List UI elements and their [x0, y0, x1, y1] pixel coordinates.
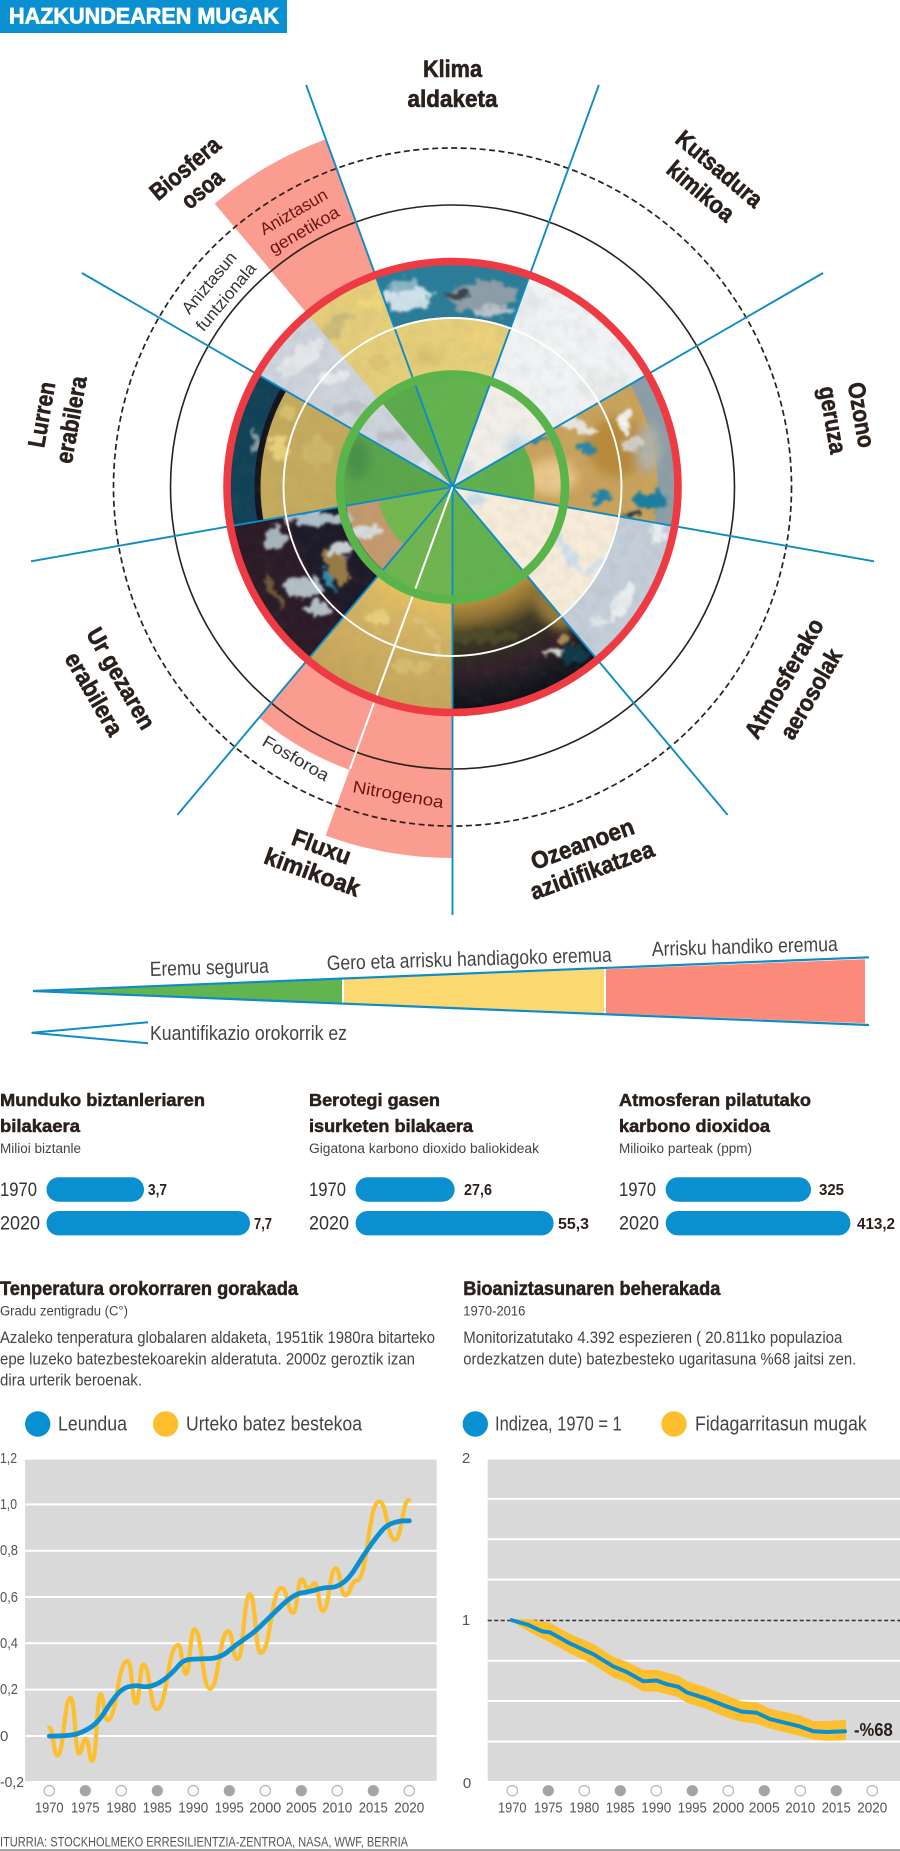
smoothed line: [49, 1521, 409, 1736]
text: Arrisku handiko eremua: Arrisku handiko eremua: [651, 933, 839, 961]
overshoot wedge: Fosforoa: [259, 487, 452, 770]
label: Kutsadura kimikoa: Kutsadura: [670, 125, 768, 214]
stat panel: atmospheric CO2: [619, 1090, 895, 1235]
inner spokes over globe: [234, 278, 671, 709]
x axis years: 1975: [534, 1800, 563, 1817]
safe zone segment: [33, 979, 342, 1003]
heading line two: isurketen bilakaera: [309, 1116, 473, 1136]
heading: Tenperatura orokorraren gorakada: [0, 1279, 298, 1300]
unit: 1970-2016: [463, 1304, 525, 1320]
label: Atmosferako aerosolak: Atmosferako: [739, 614, 830, 744]
label: Aniztasun genetikoa: genetikoa: [266, 202, 343, 258]
label: Atmosferako aerosolak: [739, 614, 857, 759]
end value: -%68: [854, 1720, 893, 1740]
legend: [25, 1411, 363, 1437]
text: Eremu segurua: Eremu segurua: [149, 955, 270, 981]
high risk boundary circle: [170, 205, 734, 769]
sector: Fluxu kimikoak: [346, 492, 452, 676]
legend: [463, 1411, 867, 1437]
label: Biosfera osoa: osoa: [176, 164, 230, 215]
label: Aniztasun funtzionala: funtzionala: [192, 259, 260, 335]
sector: Kutsadura kimikoa: [454, 279, 644, 485]
y axis labels: 1,2: [0, 1450, 17, 1467]
white middle ring: [284, 318, 622, 656]
red boundary ring: [227, 262, 678, 712]
label: Ozeanoen azidifikatzea: [517, 809, 658, 906]
bar 2020: 55,3: [558, 1216, 589, 1233]
legend: Urteko batez bestekoa: [186, 1413, 363, 1435]
heading line two: bilakaera: [0, 1116, 80, 1136]
label: Biosfera osoa: [145, 131, 244, 227]
line chart: temperature: [0, 1450, 437, 1817]
label: Fosforoa: Fosforoa: [259, 732, 333, 786]
label: Ur gezaren erabilera: [54, 623, 160, 750]
y axis labels: 0,4: [0, 1635, 18, 1652]
dashed outer circle: [114, 148, 792, 826]
overshoot wedge: Nitrogenoa: [326, 487, 452, 858]
no quantification legend: [32, 1022, 347, 1045]
x axis years: 1990: [641, 1800, 671, 1817]
earth globe sectors: [230, 264, 676, 710]
bar 2020: [0, 1211, 272, 1235]
label: Ozono geruza: [813, 379, 880, 456]
x axis years: 2005: [749, 1800, 780, 1817]
line chart: living planet index: [462, 1450, 900, 1817]
bar 1970: [0, 1177, 167, 1202]
label: Aniztasun funtzionala: [175, 245, 260, 335]
label: Fluxu kimikoak: Fluxu: [288, 824, 355, 870]
label: Aniztasun funtzionala: Aniztasun: [178, 248, 241, 318]
x axis years: 1975: [71, 1800, 100, 1817]
sector: Lurren erabilera: [230, 377, 450, 524]
y axis labels: 0: [463, 1775, 471, 1792]
label: Ur gezaren erabilera: erabilera: [59, 648, 129, 741]
legend: Indizea, 1970 = 1: [495, 1413, 622, 1435]
label: Atmosferako aerosolak: aerosolak: [775, 644, 848, 744]
confidence band: [512, 1620, 845, 1740]
legend: Fidagarritasun mugak: [695, 1413, 867, 1435]
heading: Munduko biztanleriaren: [0, 1090, 205, 1110]
planetary boundaries diagram: [21, 56, 880, 915]
sector: Aniztasun funtzionala: [261, 317, 450, 485]
x axis years: 2005: [286, 1800, 317, 1817]
stat panel: population: [0, 1090, 272, 1235]
label: Kutsadura kimikoa: [651, 125, 768, 236]
x axis years: [35, 1800, 424, 1817]
y axis labels: [462, 1450, 471, 1792]
overshoot wedge: Biosfera osoa: [215, 139, 452, 487]
x axis years: 1985: [606, 1800, 635, 1817]
bar 1970: 27,6: [464, 1182, 492, 1199]
x axis years: 1980: [106, 1800, 136, 1817]
bar 2020: [309, 1211, 589, 1235]
green safe-zone ring: [340, 374, 565, 600]
x axis years: 1985: [143, 1800, 172, 1817]
heading: Atmosferan pilatutako: [619, 1090, 811, 1110]
bar 1970: 3,7: [148, 1182, 167, 1199]
unit: Gradu zentigradu (C°): [0, 1304, 128, 1320]
legend: Leundua: [58, 1413, 128, 1435]
index line: [512, 1620, 845, 1732]
bar 1970: 325: [819, 1182, 844, 1199]
heading: Bioaniztasunaren beherakada: [463, 1279, 721, 1300]
x axis years: 1995: [678, 1800, 707, 1817]
x axis years: 1990: [178, 1800, 208, 1817]
label: Ozeanoen azidifikatzea: Ozeanoen: [527, 813, 638, 876]
label: Fluxu kimikoak: kimikoak: [260, 843, 364, 903]
x axis years: 1970: [35, 1800, 64, 1817]
description: ordezkatzen dute) batezbesteko ugaritasuna %68 jaitsi zen.: [463, 1350, 856, 1368]
high risk segment: [606, 959, 865, 1023]
x axis years: 2020: [394, 1800, 424, 1817]
source line: ITURRIA: STOCKHOLMEKO ERRESILIENTZIA-ZENTROA, NASA, WWF, BERRIA: [0, 1834, 409, 1850]
sector: Klima aldaketa: [377, 265, 528, 484]
y axis labels: 0,2: [0, 1681, 18, 1698]
x axis years: 2015: [822, 1800, 851, 1817]
label: Klima aldaketa: aldaketa: [408, 86, 498, 113]
bar 2020: 413,2: [857, 1216, 895, 1233]
label: Lurren erabilera: Lurren: [23, 380, 61, 450]
risk zones legend wedge: [33, 933, 869, 1025]
description: dira urterik beroenak.: [0, 1372, 142, 1390]
sector spokes: [31, 85, 874, 915]
y axis labels: [0, 1450, 24, 1791]
x axis years: 1970: [498, 1800, 527, 1817]
y axis labels: 0,6: [0, 1589, 18, 1606]
x axis years: 2010: [785, 1800, 815, 1817]
x axis years: 2020: [857, 1800, 887, 1817]
label: Ozono geruza: geruza: [813, 384, 851, 456]
white split line Nitrogenoa / Fosforoa outer: [350, 487, 452, 769]
label: Aniztasun genetikoa: Aniztasun: [257, 185, 331, 239]
x axis dots: [44, 1785, 414, 1796]
panel: biodiversity decline: [462, 1279, 900, 1817]
no quantification legend: Kuantifikazio orokorrik ez: [150, 1022, 347, 1045]
title banner: HAZKUNDEAREN MUGAK: [9, 4, 279, 28]
bar 1970: 1970: [309, 1179, 346, 1201]
bar 1970: 1970: [0, 1179, 37, 1201]
text: Gero eta arrisku handiagoko eremua: Gero eta arrisku handiagoko eremua: [326, 944, 613, 975]
y axis labels: 1: [462, 1612, 470, 1629]
label: Nitrogenoa: Nitrogenoa: [351, 777, 446, 812]
label: Ozono geruza: Ozono: [842, 380, 880, 450]
bar 2020: 7,7: [254, 1216, 272, 1233]
panel: temperature rise: [0, 1279, 437, 1817]
y axis labels: 2: [462, 1450, 470, 1467]
y axis labels: 0,8: [0, 1542, 18, 1559]
unit: Milioi biztanle: [0, 1141, 81, 1157]
label: Lurren erabilera: [21, 368, 93, 466]
annual mean line: [49, 1500, 409, 1761]
heading: Berotegi gasen: [309, 1090, 440, 1110]
x axis years: 2015: [359, 1800, 388, 1817]
unit: Milioiko parteak (ppm): [619, 1141, 752, 1157]
description: epe luzeko batezbestekoarekin alderatuta. 2000z geroztik izan: [0, 1350, 415, 1368]
label: Biosfera osoa: Biosfera: [145, 131, 227, 206]
x axis years: 2000: [712, 1800, 744, 1817]
sector: Aniztasun genetikoa: [310, 279, 451, 485]
unit: Gigatona karbono dioxido baliokideak: [309, 1141, 540, 1157]
x axis years: 2000: [249, 1800, 281, 1817]
x axis years: 1980: [569, 1800, 599, 1817]
label: Fluxu kimikoak: [260, 818, 374, 903]
sector: Ozono geruza: [455, 377, 674, 524]
label: Ozeanoen azidifikatzea: azidifikatzea: [527, 836, 658, 906]
bar 1970: [309, 1177, 492, 1202]
heading line two: karbono dioxidoa: [619, 1116, 770, 1136]
x axis years: [498, 1800, 887, 1817]
bar 1970: 1970: [619, 1179, 656, 1201]
description: Azaleko tenperatura globalaren aldaketa, 1951tik 1980ra bitarteko: [0, 1329, 435, 1347]
description: [463, 1329, 856, 1368]
sector: Ozeanoen azidifikatzea: [453, 490, 594, 709]
x axis years: 1995: [215, 1800, 244, 1817]
label: Ur gezaren erabilera: Ur gezaren: [80, 623, 160, 734]
description: [0, 1329, 435, 1390]
bar 2020: 2020: [619, 1212, 659, 1234]
photographic grain over globe: [234, 290, 628, 625]
description: Monitorizatutako 4.392 espezieren ( 20.811ko populazioa: [463, 1329, 843, 1347]
bar 1970: [619, 1177, 844, 1202]
x axis years: 2010: [322, 1800, 352, 1817]
y axis labels: 0: [0, 1728, 8, 1745]
baseline at index 1: [488, 1620, 900, 1622]
bar 2020: [619, 1211, 895, 1235]
white split line over globe: [376, 487, 452, 696]
sector: Atmosferako aerosolak: [454, 488, 671, 656]
y axis labels: -0,2: [0, 1774, 24, 1791]
label: Klima aldaketa: [408, 56, 498, 113]
label: Aniztasun genetikoa: [255, 184, 343, 258]
label: Klima aldaketa: Klima: [423, 56, 483, 83]
sector: Ur gezaren erabilera: [234, 488, 450, 656]
bar 2020: 2020: [0, 1212, 40, 1234]
wedge outline: [33, 957, 869, 1025]
y axis labels: 1,0: [0, 1496, 17, 1513]
stat panel: greenhouse gases: [309, 1090, 589, 1235]
label: Lurren erabilera: erabilera: [51, 374, 93, 466]
x axis dots: [507, 1785, 878, 1796]
bar 2020: 2020: [309, 1212, 349, 1234]
increasing risk segment: [344, 969, 604, 1013]
label: Kutsadura kimikoa: kimikoa: [661, 156, 740, 228]
